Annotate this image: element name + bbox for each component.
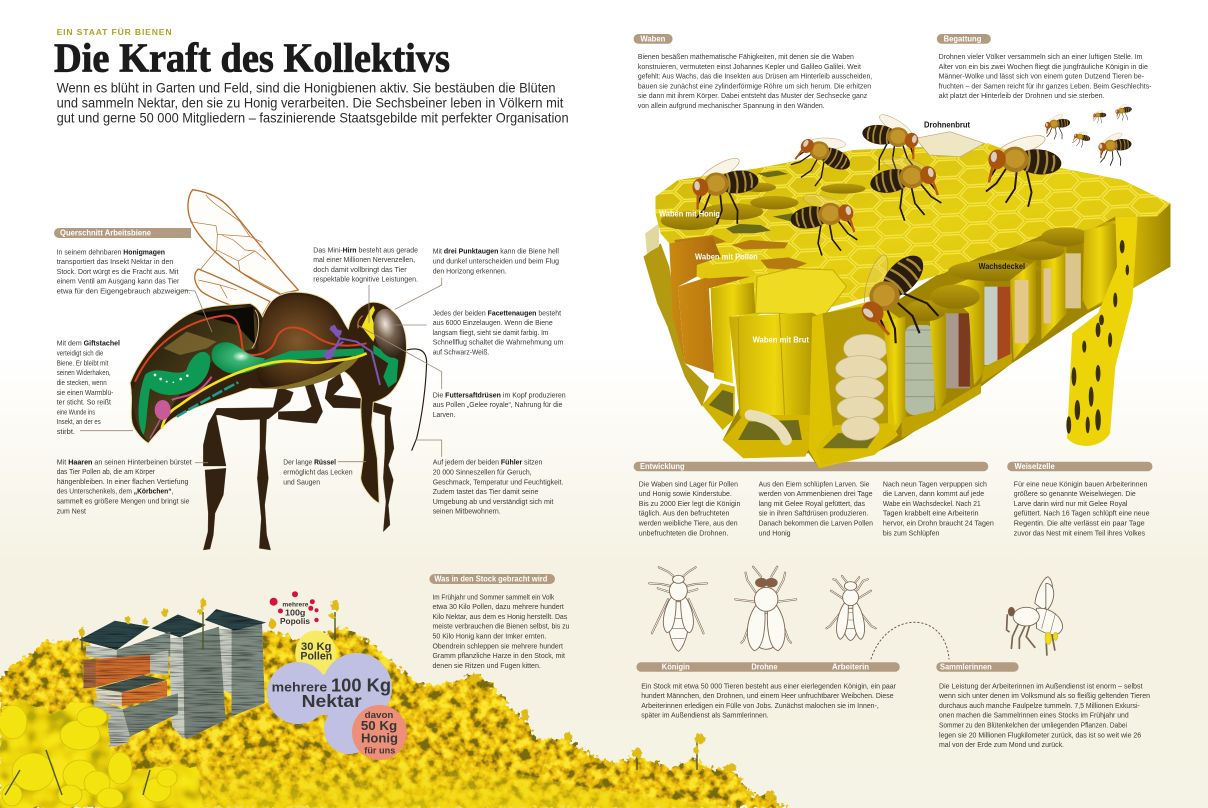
bubble: honey: 50 Kg: [361, 719, 397, 733]
section pill: Querschnitt Arbeitsbiene: Querschnitt Arbeitsbiene: [60, 229, 152, 238]
flower stalks: [79, 598, 775, 801]
section pill: Weiselzelle: Weiselzelle: [1014, 462, 1055, 471]
wall and pupa row: [883, 317, 907, 425]
intro text: Wenn es blüht in Garten und Feld, sind die Honigbienen aktiv. Sie bestäuben die Blüten: [57, 81, 556, 96]
text: Haare: sammelt es größere Mengen und bringt sie: [57, 496, 189, 506]
bubble: honey: für uns: [364, 745, 395, 756]
text: castes: Arbeiterinnen erledigen ein Fülle von Jobs. Zunächst malochen sie im Innen-,: [641, 701, 879, 710]
brood cell with larva: [729, 313, 819, 420]
text: Was in den Stock gebracht wird: Obendrein schleppen sie mehrere hundert: [432, 641, 564, 650]
right outer wall: [723, 167, 1170, 468]
pollen cells: [669, 237, 721, 363]
text: Haare: das Tier Pollen ab, die am Körper: [57, 467, 155, 476]
text: Facettenaugen: Jedes der beiden Facettenaugen besteht: [433, 308, 562, 317]
bubble: nectar: Nektar: [302, 691, 362, 711]
beehives: [78, 609, 267, 748]
text: Begattung: fruchten – der Samen reicht für ihr ganzes Leben. Beim Geschlechts-: [939, 81, 1152, 90]
text: Fühler: Umgebung ab und verständigt sich mit: [433, 497, 554, 506]
text: Begattung: akt platzt der Hinterleib der Drohnen und sie sterben.: [939, 91, 1105, 100]
text: Futtersaftdrüsen: [433, 390, 566, 419]
section pill: Begattung: [937, 34, 991, 44]
bubble: nectar: mehrere: [272, 681, 327, 695]
text: Giftstachel: ter sticht. So reißt: [57, 398, 112, 407]
text: Rüssel: ermöglicht das Lecken: [283, 468, 353, 476]
text: Giftstachel: verteidigt sich die: [57, 348, 103, 358]
text: Entwicklung column 3: [883, 479, 994, 537]
text: Sammlerinnen: mal von der Erde zum Mond und zurück.: [939, 740, 1064, 749]
text: Weiselzelle: zuvor das Nest mit einem Teil ihres Volkes: [1014, 528, 1145, 537]
body: [130, 292, 407, 503]
section pill: Sammlerinnen: Sammlerinnen: [940, 663, 992, 672]
text: Haare: [57, 457, 192, 515]
text: Giftstachel: stirbt.: [57, 427, 75, 436]
hexagon cells: [655, 143, 1170, 320]
text: Weiselzelle: [1014, 479, 1150, 537]
wings: [188, 190, 298, 317]
right tower: [219, 628, 232, 693]
text: Entwicklung column 2: sie in ihren Saftdrüsen produzieren.: [759, 509, 868, 518]
text: Entwicklung column 3: bis zum Schlüpfen: [883, 528, 939, 537]
text: Mini-Hirn: respektable kognitive Leistungen.: [313, 275, 418, 284]
text: Honigmagen: Stock. Dort würgt es die Fracht aus. Mit: [57, 267, 179, 276]
icon: worker: [826, 576, 876, 641]
nerve cord and glands: [162, 353, 367, 428]
section pill: Entwicklung: [634, 462, 988, 471]
text: Waben: Bienen besäßen mathematische Fähigkeiten, mit denen sie die Waben: [638, 52, 854, 61]
text: Begattung: Drohnen vieler Völker versammeln sich an einer luftigen Stelle. Im: [939, 52, 1142, 61]
text: Entwicklung column 3: Wabe ein Wachsdeckel. Nach 21: [883, 499, 981, 508]
section pill: Waben: Waben: [640, 34, 666, 43]
text: Sammlerinnen: Die Leistung der Arbeiterinnen im Außendienst ist enorm – selbst: [939, 681, 1143, 690]
text: Waben: [638, 52, 872, 110]
text: Giftstachel: Biene. Er bleibt mit: [57, 358, 109, 367]
text: Entwicklung column 3: Tagen krabbelt eine Arbeiterin: [883, 509, 979, 518]
text: Futtersaftdrüsen: Larven.: [433, 410, 455, 419]
text: Giftstachel: Insekt, an der es: [57, 417, 101, 426]
text: castes: hundert Männchen, den Drohnen, und einem Heer unfruchtbarer Weibchen. Diese: [641, 691, 894, 700]
text: Weiselzelle: Für eine neue Königin bauen Arbeiterinnen: [1014, 479, 1147, 488]
text: Haare: Mit Haaren an seinen Hinterbeinen bürstet: [57, 457, 192, 466]
text: Giftstachel: Mit dem Giftstachel: [57, 339, 120, 348]
label: propolis: mehrere: [282, 602, 309, 609]
pointer lines: [80, 278, 442, 463]
brighter lower field: [150, 750, 740, 808]
head brain, eye and glands: [362, 306, 377, 342]
flying drones: [1044, 102, 1134, 167]
text: Futtersaftdrüsen: aus Pollen „Gelee royale“, Nahrung für die: [433, 400, 562, 409]
text: Entwicklung column 1: werden weibliche Tiere, aus den: [638, 518, 738, 528]
text: Facettenaugen: aus 6000 Einzelaugen. Wenn die Biene: [433, 318, 553, 327]
text: Entwicklung column 2: Aus den Eiern schlüpfen Larven. Sie: [759, 479, 870, 488]
queen cell: [1066, 217, 1138, 446]
text: Was in den Stock gebracht wird: [432, 592, 570, 670]
text: Haare: zum Nest: [57, 506, 87, 515]
kicker: EIN STAAT FÜR BIENEN: [57, 27, 172, 37]
text: Was in den Stock gebracht wird: etwa 30 Kilo Pollen, dazu mehrere hundert: [432, 602, 565, 611]
text: Sammlerinnen: durchaus auch manche Faulpelze tummeln. 7,5 Millionen Exkursi-: [939, 701, 1140, 710]
text: Was in den Stock gebracht wird: meiste verbrauchen die Bienen selbst, bis zu: [432, 622, 570, 631]
bee caste line drawings: [649, 567, 1063, 655]
text: Waben: von allein aufgrund mechanischer Spannung in den Wänden.: [638, 101, 825, 110]
text: Facettenaugen: Schnellflug schaltet die Wahrnehmung um: [433, 338, 563, 347]
bees on comb: [689, 109, 1065, 353]
text: Sammlerinnen: onen machen die Sammelrinnen eines Stocks im Frühjahr und: [939, 711, 1129, 720]
text: Giftstachel: die stecken, wenn: [57, 378, 107, 387]
text: Fühler: [433, 458, 563, 516]
comb labels: Drohnenbrut: [924, 121, 970, 130]
text: Honigmagen: einem Ventil am Ausgang kann das Tier: [57, 277, 180, 286]
intro text: [57, 81, 569, 126]
text: Haare: hängenbleiben. In einer flachen Vertiefung: [57, 477, 188, 486]
section pill: castes: Drohne: [751, 663, 778, 672]
intro text: gut und gerne 50 000 Mitgliedern – faszinierende Staatsgebilde mit perfekter Organisation: [57, 111, 569, 126]
text: Punktaugen: den Horizong erkennen.: [433, 266, 507, 275]
section pill: castes: [636, 662, 900, 672]
thorax tissue: [258, 295, 346, 387]
text: Honigmagen: etwa für den Eigengebrauch abzweigen.: [57, 286, 191, 296]
section pill: Was in den Stock gebracht wird: Was in den Stock gebracht wird: [434, 575, 548, 584]
text: Entwicklung column 3: hervor, ein Drohn braucht 24 Tagen: [883, 518, 994, 528]
text: Entwicklung column 1: Die Waben sind Lager für Pollen: [639, 479, 738, 488]
abdomen interior: [132, 306, 257, 442]
text: Entwicklung column 1: täglich. Aus den befruchteten: [639, 509, 729, 518]
text: Weiselzelle: Regentin. Die alte verlässt ein paar Tage: [1014, 518, 1145, 528]
text: Entwicklung column 2: lang mit Gelee Royal gefüttert, das: [759, 499, 865, 508]
text: Futtersaftdrüsen: Die Futtersaftdrüsen im Kopf produzieren: [433, 390, 566, 399]
text: Was in den Stock gebracht wird: Im Frühjahr und Sommer sammelt ein Volk: [432, 592, 554, 601]
comb labels: Waben mit Pollen: [695, 252, 758, 261]
title: Die Kraft des Kollektivs: [54, 35, 450, 81]
comb labels: Wachsdeckel: [978, 262, 1025, 271]
label: propolis: [280, 602, 310, 626]
text: Was in den Stock gebracht wird: Gramm pflanzliche Harze in den Stock, mit: [432, 651, 566, 660]
text: castes: [641, 681, 896, 720]
text: Facettenaugen: langsam fliegt, sieht sie damit farbig. Im: [433, 328, 548, 337]
text: Fühler: seinen Mitbewohnern.: [433, 507, 501, 516]
text: Mini-Hirn: [313, 245, 418, 284]
propolis dots: [270, 591, 319, 622]
comb labels: Waben mit Brut: [753, 335, 809, 344]
text: Sammlerinnen: Sommer zu den Blütenkelchen der umliegenden Pflanzen. Dabei: [939, 720, 1127, 730]
text: Waben: gefehlt: Aus Wachs, das die Insekten aus Drüsen am Hinterleib ausscheiden,: [638, 72, 872, 81]
text: Waben: sie dann mit ihrem Körper. Dabei entsteht das Muster der Sechsecke ganz: [638, 91, 867, 100]
text: castes: Ein Stock mit etwa 50 000 Tieren besteht aus einer eierlegenden Königin, ein paar: [641, 681, 896, 690]
text: Entwicklung column 2: und Honig: [759, 528, 791, 537]
section pill: Entwicklung: Entwicklung: [640, 462, 685, 471]
text: Was in den Stock gebracht wird: Kilo Nektar, aus dem es Honig herstellt. Das: [432, 612, 567, 621]
text: Facettenaugen: auf Schwarz-Weiß.: [433, 348, 489, 356]
text: Entwicklung column 1: und Honig sowie Kinderstube.: [639, 489, 732, 498]
text: Sammlerinnen: [938, 681, 1150, 749]
text: Entwicklung column 2: Danach bekommen die Larven Pollen: [759, 518, 873, 528]
text: Punktaugen: [433, 247, 559, 275]
text: Haare: des Unterschenkels, dem „Körbchen“,: [57, 487, 173, 496]
dotted arc connecting Arbeiterin and Sammlerinnen: [871, 622, 949, 659]
section pill: Waben: [634, 34, 673, 44]
text: Begattung: Männer-Wolke und lässt sich von einem guten Dutzend Tieren be-: [939, 72, 1144, 81]
bee cross-section illustration: [130, 190, 427, 550]
section pill: castes: Arbeiterin: [832, 663, 869, 672]
intro text: und sammeln Nektar, den sie zu Honig verarbeiten. Die Sechsbeiner leben in Völkern mit: [57, 96, 564, 111]
text: Mini-Hirn: mal einer Millionen Nervenzellen,: [313, 255, 415, 264]
label: propolis: Popolis: [280, 616, 310, 626]
text: Honigmagen: In seinem dehnbaren Honigmagen: [57, 247, 165, 256]
text: Fühler: Geschmack, Temperatur und Feuchtigkeit.: [433, 477, 563, 486]
icon: queen: [649, 567, 707, 651]
dorsal vessel: [135, 316, 367, 382]
text: Was in den Stock gebracht wird: denen sie Ritzen und Fugen kitten.: [432, 661, 541, 670]
bubble: pollen: [295, 630, 336, 676]
upper open cells: [755, 268, 847, 317]
text: Mini-Hirn: doch damit vollbringt das Tier: [313, 265, 407, 274]
bubble: honey: davon: [365, 710, 394, 721]
queen-sized brood cell with pupa: [809, 300, 902, 468]
text: Fühler: Auf jedem der beiden Fühler sitzen: [433, 458, 542, 467]
honey stomach and gut: [139, 342, 398, 435]
text: Giftstachel: seinen Widerhaken,: [57, 368, 111, 377]
text: Rüssel: und Saugen: [283, 477, 320, 486]
middle tower: [168, 637, 184, 740]
section pill: Sammlerinnen: [936, 662, 1019, 672]
text: Honigmagen: [57, 247, 191, 296]
bubble: pollen: Pollen: [300, 650, 332, 662]
legs: [203, 373, 394, 550]
text: Giftstachel: eine Wunde ins: [57, 407, 95, 416]
text: Giftstachel: sie einen Warmblü-: [57, 388, 114, 397]
text: Entwicklung column 2: [758, 479, 873, 537]
rapeseed field, back layer: [0, 627, 787, 808]
text: Rüssel: [283, 458, 353, 486]
text: Entwicklung column 3: Nach neun Tagen verpuppen sich: [883, 479, 987, 488]
section pill: Querschnitt Arbeitsbiene: [54, 228, 191, 238]
text: Fühler: 20 000 Sinneszellen für Geruch,: [433, 468, 532, 476]
bubble: nectar: 100 Kg: [331, 676, 391, 696]
text: Giftstachel: [57, 339, 120, 436]
comb labels: [659, 121, 1025, 344]
text: Begattung: [939, 52, 1152, 100]
text: Mini-Hirn: Das Mini-Hirn besteht aus gerade: [313, 245, 418, 254]
text: Entwicklung column 1: unbefruchteten die Drohnen.: [639, 528, 728, 537]
text: Fühler: Zudem tastet das Tier damit seine: [433, 487, 538, 496]
comb labels: Waben mit Honig: [659, 210, 720, 219]
text: Weiselzelle: größere so genannte Weiselwiegen. Die: [1014, 489, 1136, 498]
bubble: pollen: 30 Kg: [301, 641, 331, 653]
section pill: Begattung: Begattung: [944, 34, 982, 43]
text: Entwicklung column 1: Bis zu 2000 Eier legt die Königin: [639, 499, 740, 508]
text: Entwicklung column 3: die Larven, dann kommt auf jede: [883, 489, 984, 498]
text: Was in den Stock gebracht wird: 50 Kilo Honig kann der Imker ernten.: [432, 632, 546, 640]
text: Rüssel: Der lange Rüssel: [283, 458, 336, 467]
text: Punktaugen: und dunkel unterscheiden und beim Flug: [433, 256, 559, 266]
section pill: castes: Königin: [662, 663, 690, 672]
honeycomb illustration: [643, 102, 1170, 468]
bubble: honey: Honig: [361, 731, 398, 745]
text: Honigmagen: transportiert das Insekt Nektar in den: [57, 257, 173, 266]
icon: drone: [735, 567, 796, 651]
stems: [5, 612, 697, 795]
single blossoms: [0, 705, 177, 808]
text: Waben: bauen sie zunächst eine zylinderförmige Röhre um sich herum. Die erhitzen: [638, 81, 871, 90]
comb top surface: [655, 143, 1170, 320]
rapeseed field, front layer: [0, 640, 787, 808]
icon: forager: [1007, 577, 1063, 655]
text: Begattung: Alter von ein bis zwei Wochen fliegt die jungfräuliche Königin in die: [939, 62, 1148, 71]
lower steps: [702, 383, 735, 430]
honey caps and empty cells: [661, 183, 866, 230]
text: Entwicklung column 1: [638, 479, 740, 537]
label: propolis: 100g: [285, 608, 305, 618]
bubble: honey: [352, 705, 407, 760]
text: Sammlerinnen: wenn sich unter denen im Volksmund als so fleißig geltenden Tieren: [938, 691, 1150, 700]
left box: [86, 645, 117, 660]
large rapeseed blossoms: [0, 700, 205, 808]
text: Weiselzelle: Larve darin wird nur mit Gelee Royal: [1014, 499, 1128, 508]
bubble: nectar: [267, 653, 392, 754]
section pill: Weiselzelle: [1007, 462, 1152, 471]
left stepped edge: [643, 243, 709, 407]
drone brood cells: [916, 132, 984, 157]
antenna: [407, 349, 427, 451]
text: Sammlerinnen: legen sie 20 Millionen Flugkilometer zurück, das ist so weit wie 26: [939, 730, 1141, 739]
text: Weiselzelle: gefüttert. Nach 16 Tagen schlüpft eine neue: [1014, 509, 1150, 518]
text: Punktaugen: Mit drei Punktaugen kann die Biene hell: [433, 247, 559, 256]
text: Facettenaugen: [433, 308, 563, 356]
text: castes: später im Außendienst als Sammlerinnen.: [641, 711, 769, 720]
text: Waben: konstruieren, vermuteten einst Johannes Kepler und Galileo Galilei. Weit: [638, 62, 862, 71]
text: Entwicklung column 2: werden von Ammenbienen drei Tage: [758, 489, 873, 498]
